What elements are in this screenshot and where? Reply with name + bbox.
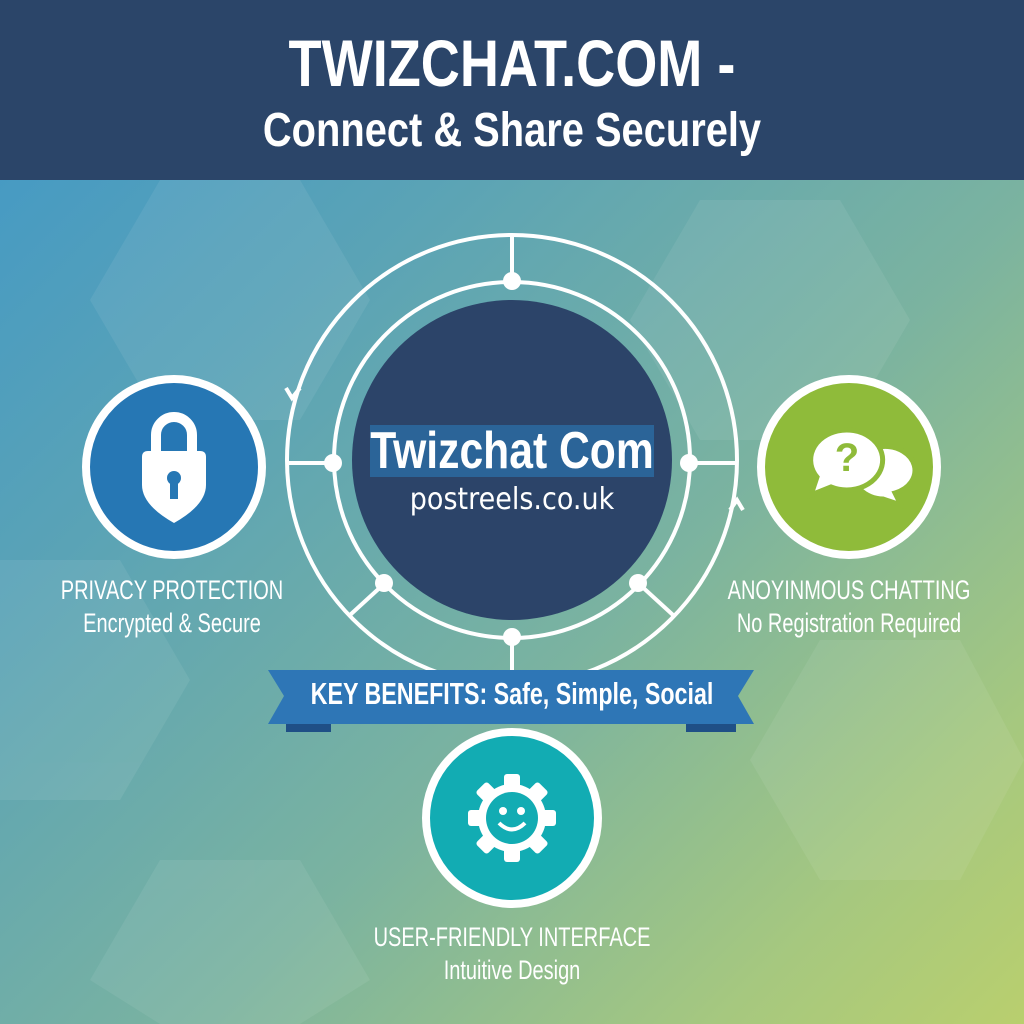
label: privacy: PRIVACY PROTECTION: [61, 575, 283, 605]
label: user-friendly: [374, 922, 650, 985]
title: TWIZCHAT.COM -: [289, 26, 735, 100]
label: user-friendly: USER-FRIENDLY INTERFACE: [374, 922, 650, 952]
label: anonymous: ANOYINMOUS CHATTING: [728, 575, 970, 605]
icon: chat: [757, 375, 941, 559]
label: anonymous: No Registration Required: [737, 608, 961, 638]
center subtitle: postreels.co.uk: [410, 482, 614, 517]
banner: [268, 670, 754, 732]
subtitle: Connect & Share Securely: [263, 104, 761, 157]
icon: chat: ?: [835, 436, 859, 480]
header: [0, 0, 1024, 180]
label: privacy: Encrypted & Secure: [83, 608, 261, 638]
label: anonymous: [728, 575, 970, 638]
icon: gear smiley: [422, 728, 602, 908]
banner text: KEY BENEFITS: Safe, Simple, Social: [311, 676, 713, 711]
icon: lock: [82, 375, 266, 559]
label: privacy: [61, 575, 283, 638]
center title: Twizchat Com: [370, 422, 654, 480]
label: user-friendly: Intuitive Design: [444, 955, 580, 985]
